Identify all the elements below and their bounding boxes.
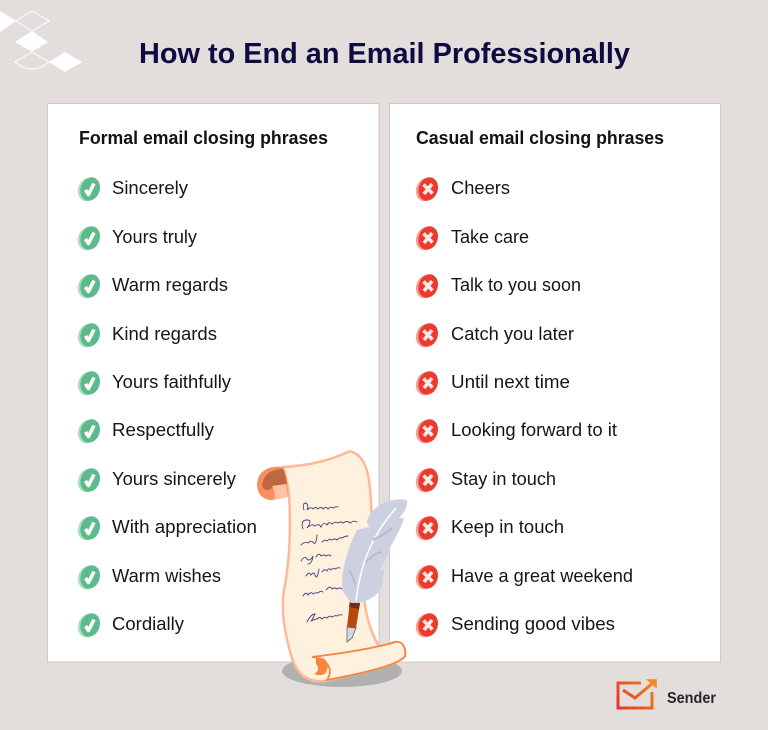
- formal list: Warm wishes: [112, 565, 221, 586]
- scroll shadow: [282, 655, 402, 687]
- formal list: Respectfully: [112, 419, 215, 440]
- logo wordmark: Sender: [667, 690, 716, 707]
- formal list: Yours faithfully: [112, 371, 232, 392]
- casual list: [413, 174, 633, 640]
- quill nib: [347, 627, 356, 642]
- heading: casual: Casual email closing phrases: [416, 128, 664, 148]
- formal list: Sincerely: [112, 177, 189, 198]
- formal list: [75, 174, 257, 640]
- scroll body: [283, 451, 405, 681]
- formal list: Warm regards: [112, 274, 228, 295]
- title: How to End an Email Professionally: [139, 38, 630, 70]
- decorative diamonds: [0, 11, 82, 72]
- formal list: Kind regards: [112, 323, 217, 344]
- handwriting: [301, 503, 357, 622]
- casual list: Sending good vibes: [451, 613, 615, 634]
- formal list: Yours sincerely: [112, 468, 237, 489]
- logo envelope icon: [618, 680, 656, 708]
- casual list: Until next time: [451, 371, 570, 392]
- casual list: Keep in touch: [451, 516, 564, 537]
- formal list: With appreciation: [112, 516, 257, 537]
- panel: casual email closing phrases: [390, 104, 720, 662]
- scroll bottom curl: [312, 642, 405, 680]
- casual list: Looking forward to it: [451, 419, 617, 440]
- scroll top curl: [257, 467, 288, 500]
- casual list: Catch you later: [451, 323, 574, 344]
- casual list: Take care: [451, 226, 529, 247]
- casual list: Talk to you soon: [451, 274, 581, 295]
- formal list: Yours truly: [112, 226, 198, 247]
- illustration: scroll and quill: [257, 451, 407, 687]
- casual list: Cheers: [451, 177, 510, 198]
- feather: [342, 499, 407, 603]
- logo: Sender: [618, 680, 716, 708]
- formal list: Cordially: [112, 613, 185, 634]
- panel: formal email closing phrases: [48, 104, 379, 662]
- casual list: Stay in touch: [451, 468, 556, 489]
- casual list: Have a great weekend: [451, 565, 633, 586]
- heading: formal: Formal email closing phrases: [79, 128, 328, 148]
- quill holder: [347, 601, 360, 628]
